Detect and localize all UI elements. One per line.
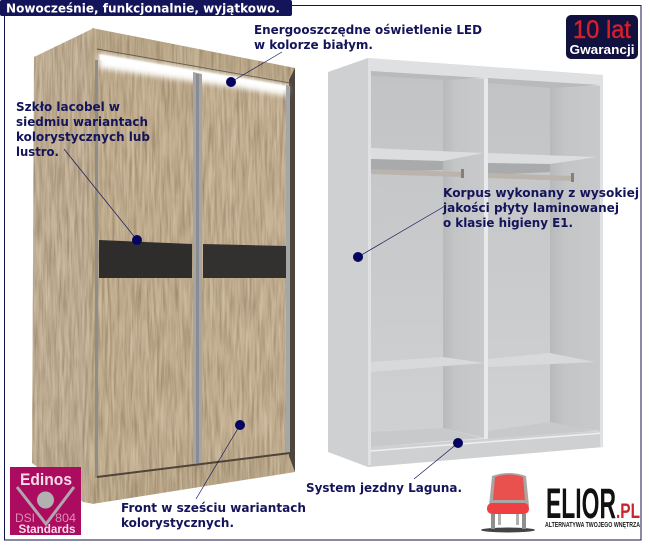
callout line: rail system <box>414 438 463 479</box>
hanging rails <box>371 169 463 177</box>
top rail line <box>97 49 290 83</box>
text: carcass: jakości płyty laminowanej <box>442 201 619 215</box>
text: front <box>121 501 306 530</box>
front outline <box>368 58 603 467</box>
wardrobe: sliding doors, oak front <box>32 28 295 504</box>
lower shelf left <box>370 357 485 372</box>
badge: Edinos standards: DSI <box>15 511 35 525</box>
callout line: glass <box>64 149 142 245</box>
text: LED lighting: w kolorze białym. <box>254 38 373 52</box>
glass panels <box>99 240 192 278</box>
badge: Edinos standards <box>10 467 81 536</box>
header banner: Nowocześnie, funkcjonalnie, wyjątkowo. <box>6 0 280 16</box>
side panel <box>328 58 368 467</box>
aluminium profiles <box>193 72 202 464</box>
text: lacobel glass <box>16 100 150 159</box>
callout line: front <box>196 420 245 499</box>
floor left <box>371 428 481 447</box>
text: carcass <box>442 186 639 230</box>
badge: 10 years warranty <box>566 15 638 59</box>
bottom rail and plinth <box>368 431 603 467</box>
text: lacobel glass: lustro. <box>16 145 59 159</box>
left door <box>97 50 193 477</box>
text: lacobel glass: kolorystycznych lub <box>16 130 150 144</box>
bottom rail <box>97 453 290 477</box>
badge: Edinos standards: Standards <box>18 522 76 536</box>
badge: 10 years warranty: Gwarancji <box>570 42 634 57</box>
left edge of the carcass <box>368 60 371 465</box>
left inner side <box>443 79 484 438</box>
LED strip glow <box>99 54 288 96</box>
text: rail system: System jezdny Laguna. <box>306 481 462 495</box>
badge: Edinos standards: 804 <box>55 511 76 525</box>
badge: Edinos standards: Edinos <box>20 470 72 489</box>
callout line: carcass <box>353 206 445 262</box>
callout line: LED <box>226 52 282 87</box>
side panel <box>32 28 94 504</box>
text: carcass: o klasie higieny E1. <box>443 216 573 230</box>
front frame <box>92 28 295 504</box>
wardrobe: open white carcass <box>328 58 603 467</box>
text: LED lighting <box>254 23 482 52</box>
text: lacobel glass: Szkło lacobel w <box>16 100 120 114</box>
text: LED lighting: Energooszczędne oświetlenie LED <box>254 23 482 37</box>
dark inner side <box>289 68 295 472</box>
right inner side <box>550 85 600 431</box>
right edge <box>600 84 603 447</box>
top inner shadows <box>371 71 484 80</box>
logo: red chair <box>481 473 535 532</box>
badge: 10 years warranty: 10 lat <box>573 16 631 44</box>
text: front: Front w sześciu wariantach <box>121 501 306 515</box>
right back wall <box>488 80 550 431</box>
lower shelf right <box>488 353 595 367</box>
text: carcass: Korpus wykonany z wysokiej <box>443 186 639 200</box>
left back wall <box>371 76 443 440</box>
text: lacobel glass: siedmiu wariantach <box>16 115 148 129</box>
upper shelf right <box>488 153 597 164</box>
centre partition <box>484 79 488 439</box>
floor right <box>488 422 595 439</box>
logo: ELIOR.PL wordmark: .PL <box>616 500 640 523</box>
text: front: kolorystycznych. <box>121 516 234 530</box>
upper shelf left <box>371 148 484 161</box>
top board <box>368 58 603 85</box>
right door <box>202 69 287 463</box>
